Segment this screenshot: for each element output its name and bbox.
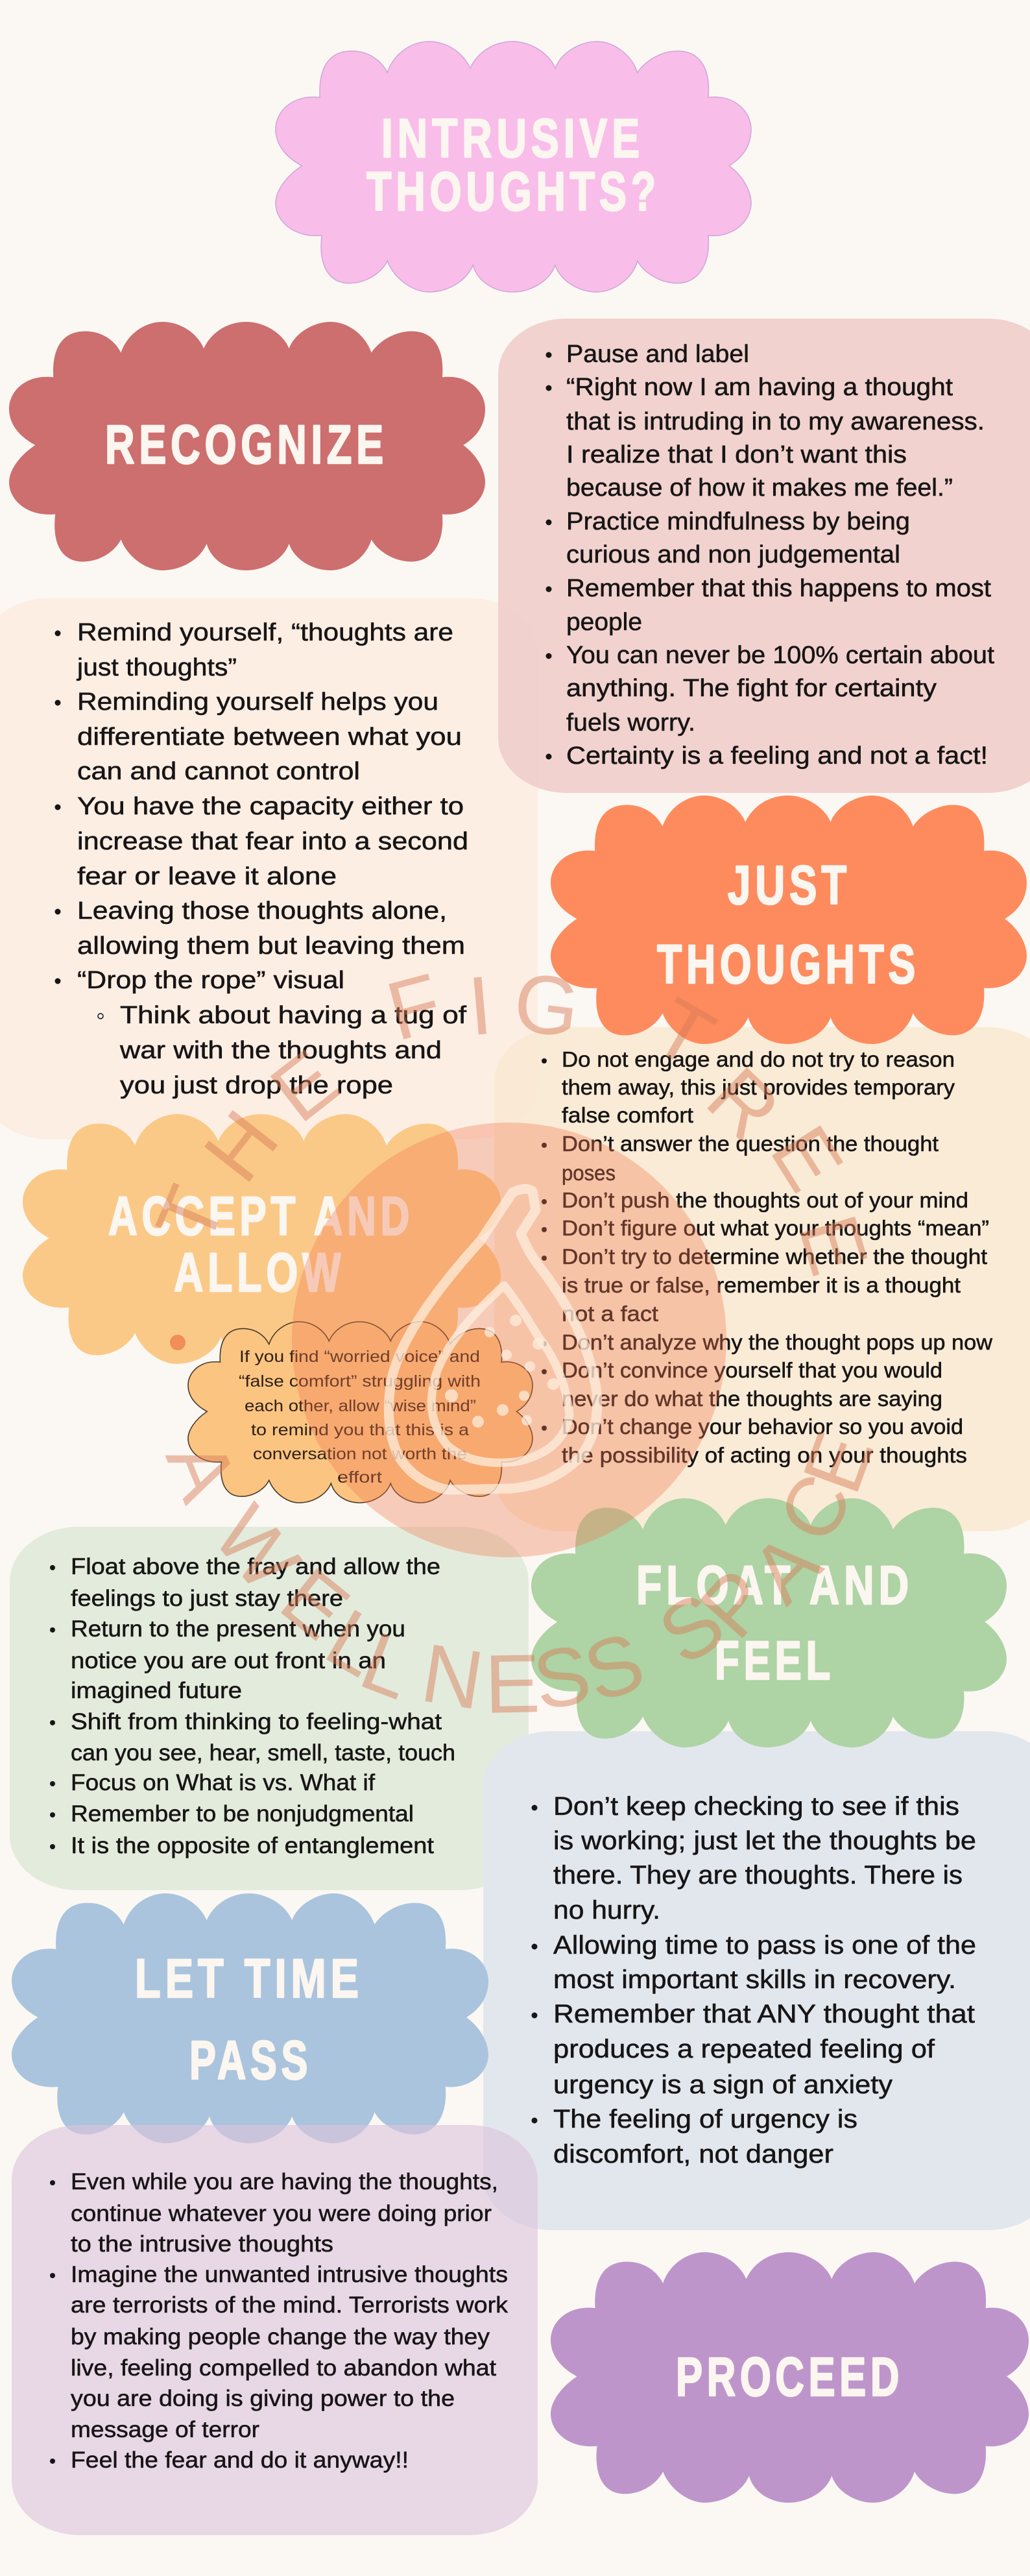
watermark text: a wellness space: L [311, 1591, 398, 1695]
callout cloud: worried voice [188, 1322, 533, 1503]
watermark text: the fig tree: E [781, 1205, 885, 1285]
list text: pause and label: because of how it makes me feel.” [566, 474, 953, 502]
list text: float above the fray: Remember to be nonjudgmental [71, 1801, 414, 1827]
list text: pause and label: “Right now I am having a thought [566, 374, 953, 401]
list text: remind yourself: Leaving those thoughts alone, [77, 897, 447, 925]
panel: do not engage list [494, 1027, 1030, 1531]
watermark text: a wellness space: W [195, 1489, 317, 1609]
list text: float above the fray: imagined future [71, 1678, 242, 1703]
panel: thoughts are just thoughts list [0, 598, 538, 1139]
panel: float list [10, 1527, 529, 1890]
watermark text: a wellness space: S [573, 1614, 654, 1720]
list text: do not keep checking: discomfort, not danger [553, 2140, 833, 2169]
list text: pause and label: people [566, 609, 642, 636]
watermark text: a wellness space: E [785, 1420, 891, 1504]
list text: pause and label: anything. The fight for certainty [566, 675, 937, 702]
list text: do not engage [542, 1047, 992, 1467]
callout text: effort [337, 1468, 382, 1487]
list text: remind yourself: you just drop the rope [120, 1072, 393, 1099]
list text: even while having the thoughts: live, feeling compelled to abandon what [71, 2355, 496, 2381]
heading cloud: let time pass [12, 1893, 488, 2143]
watermark text: a wellness space: S [527, 1627, 597, 1728]
list text: pause and label: I realize that I don’t want this [566, 441, 907, 468]
watermark text: the fig tree: H [186, 1094, 296, 1198]
list text: do not engage: not a fact [562, 1302, 658, 1326]
list text: do not engage: Don’t figure out what your thoughts “mean” [562, 1216, 989, 1240]
panel: let time pass list [483, 1731, 1030, 2230]
list text: float above the fray: feelings to just stay there [71, 1586, 343, 1611]
list text: pause and label [546, 341, 994, 770]
watermark text: a wellness space: L [349, 1614, 425, 1718]
list text: even while having the thoughts: you are doing is giving power to the [71, 2386, 455, 2411]
list text: do not keep checking: The feeling of urgency is [553, 2105, 857, 2133]
heading: float and feel: FLOAT AND [636, 1555, 913, 1616]
watermark circle [292, 1123, 726, 1557]
watermark text: the fig tree: T [638, 980, 728, 1086]
heading: let time pass: PASS [189, 2030, 312, 2091]
list text: float above the fray: Shift from thinking to feeling-what [71, 1709, 442, 1734]
list text: do not keep checking: produces a repeated feeling of [553, 2035, 935, 2063]
panel: proceed list [12, 2125, 538, 2535]
list text: pause and label: curious and non judgemental [566, 541, 900, 568]
list text: even while having the thoughts: Feel the fear and do it anyway!! [71, 2448, 409, 2473]
list text: remind yourself: increase that fear into a second [77, 828, 468, 855]
watermark text: a wellness space: N [416, 1627, 489, 1727]
heading cloud: float and feel [531, 1498, 1007, 1747]
watermark text: the fig tree: I [464, 959, 496, 1053]
list text: float above the fray: notice you are out front in an [71, 1648, 386, 1673]
title text [366, 108, 660, 222]
list text: do not engage: Don’t answer the question the thought [562, 1132, 939, 1156]
list text: even while having the thoughts: continue whatever you were doing prior [71, 2201, 492, 2226]
heading: accept and allow: ACCEPT AND [108, 1185, 414, 1246]
list text: do not engage: Don’t convince yourself that you would [562, 1358, 942, 1382]
watermark: the fig tree logo [138, 955, 891, 1731]
list text: do not engage: Don’t push the thoughts out of your mind [562, 1188, 968, 1212]
title text: INTRUSIVE [381, 108, 644, 169]
heading: accept and allow [108, 1185, 414, 1303]
icon: fig seeds [445, 1315, 559, 1428]
list text: pause and label: Certainty is a feeling and not a fact! [566, 742, 988, 770]
watermark text: a wellness space: P [682, 1552, 789, 1655]
heading: float and feel: FEEL [715, 1630, 835, 1691]
watermark dot [170, 1335, 186, 1350]
list text: do not engage: Don’t analyze why the thought pops up now [562, 1330, 992, 1354]
heading cloud: recognize [9, 322, 485, 570]
heading: float and feel [636, 1555, 913, 1691]
list text: remind yourself: Think about having a tug of [120, 1002, 467, 1029]
title cloud [276, 42, 751, 292]
title text: THOUGHTS? [366, 161, 660, 222]
list text: even while having the thoughts: by making people change the way they [71, 2324, 490, 2350]
list text: pause and label: Remember that this happens to most [566, 575, 991, 602]
list text: do not engage: poses [562, 1161, 616, 1185]
heading: just thoughts [657, 855, 920, 995]
icon: fig inner drop [431, 1285, 569, 1463]
list text: remind yourself: You have the capacity either to [77, 793, 464, 820]
watermark text: a wellness space: A [734, 1516, 839, 1621]
callout text: “false comfort” struggling with [239, 1372, 481, 1391]
panel: recognize list [498, 319, 1030, 793]
list text: do not keep checking: is working; just let the thoughts be [553, 1827, 976, 1855]
callout text: each other, allow “wise mind” [245, 1397, 476, 1415]
watermark text: a wellness space: C [760, 1459, 870, 1557]
list text: even while having the thoughts: Imagine the unwanted intrusive thoughts [71, 2262, 508, 2287]
list text: even while having the thoughts: Even while you are having the thoughts, [71, 2169, 498, 2194]
watermark text: the fig tree: E [753, 1110, 861, 1206]
list text: pause and label: Pause and label [566, 341, 749, 368]
list text: float above the fray: can you see, hear, smell, taste, touch [71, 1740, 455, 1766]
list text: do not keep checking: there. They are thoughts. There is [553, 1861, 963, 1889]
heading: just thoughts: JUST [728, 855, 851, 916]
callout text: to remind you that this is a [251, 1421, 469, 1439]
list text: remind yourself: just thoughts” [77, 654, 237, 681]
list text: remind yourself: “Drop the rope” visual [77, 967, 344, 994]
watermark text: the fig tree: T [138, 1174, 243, 1257]
list text: even while having the thoughts: to the intrusive thoughts [71, 2231, 333, 2257]
list text: even while having the thoughts [50, 2169, 509, 2473]
list text: remind yourself [54, 619, 468, 1099]
list text: do not keep checking: most important skills in recovery. [553, 1965, 956, 1994]
watermark text: a wellness space [148, 1420, 891, 1731]
list text: float above the fray: It is the opposite of entanglement [71, 1833, 434, 1858]
list text: float above the fray: Return to the present when you [71, 1616, 405, 1642]
watermark text: the fig tree: F [377, 956, 451, 1059]
list text: do not keep checking: urgency is a sign of anxiety [553, 2071, 892, 2099]
list text: do not engage: Do not engage and do not try to reason [562, 1047, 955, 1071]
list text: remind yourself: differentiate between what you [77, 723, 462, 751]
list text: do not engage: Don’t try to determine whether the thought [562, 1245, 987, 1269]
heading: let time pass: LET TIME [135, 1948, 363, 2009]
watermark text: a wellness space: E [264, 1551, 366, 1657]
list text: pause and label: that is intruding in to my awareness. [566, 408, 985, 435]
list text: even while having the thoughts: message of terror [71, 2417, 259, 2442]
callout text: If you find “worried voice” and [239, 1348, 480, 1366]
list text: do not engage: never do what the thoughts are saying [562, 1387, 942, 1411]
heading cloud: proceed [551, 2252, 1029, 2503]
watermark text: the fig tree: E [254, 1032, 355, 1140]
list text: do not engage: false comfort [562, 1103, 693, 1127]
heading: recognize: RECOGNIZE [105, 414, 388, 475]
watermark text: a wellness space: S [643, 1575, 740, 1683]
list text: float above the fray: Focus on What is vs. What if [71, 1770, 375, 1795]
heading: proceed: PROCEED [676, 2346, 904, 2407]
list text: remind yourself: Reminding yourself helps you [77, 688, 438, 716]
callout text: conversation not worth the [253, 1445, 467, 1463]
list text: do not engage: the possibility of acting on your thoughts [562, 1443, 967, 1467]
list text: remind yourself: Remind yourself, “thoughts are [77, 619, 453, 646]
list text: remind yourself: can and cannot control [77, 758, 360, 785]
list text: do not keep checking: Remember that ANY thought that [553, 2000, 975, 2028]
list text: do not keep checking: no hurry. [553, 1896, 660, 1925]
list text: pause and label: fuels worry. [566, 709, 695, 736]
icon: fig outline [389, 1189, 597, 1490]
list text: pause and label: Practice mindfulness by being [566, 508, 910, 535]
list text: do not engage: Don’t change your behavior so you avoid [562, 1415, 963, 1439]
list text: pause and label: You can never be 100% certain about [566, 642, 994, 669]
watermark text: the fig tree: R [689, 1050, 797, 1158]
list text: do not keep checking [532, 1792, 976, 2169]
list text: float above the fray [50, 1554, 455, 1858]
watermark text: the fig tree [138, 955, 885, 1285]
list text: remind yourself: war with the thoughts and [119, 1037, 442, 1064]
list text: even while having the thoughts: are terrorists of the mind. Terrorists work [71, 2292, 509, 2318]
heading: let time pass [135, 1948, 363, 2091]
list text: float above the fray: Float above the fray and allow the [71, 1554, 440, 1579]
list text: do not engage: them away, this just provides temporary [562, 1075, 955, 1099]
watermark text: a wellness space: E [484, 1637, 541, 1731]
list text: do not engage: is true or false, remember it is a thought [562, 1273, 961, 1297]
list text: do not keep checking: Don’t keep checking to see if this [553, 1792, 959, 1821]
heading: just thoughts: THOUGHTS [657, 934, 920, 995]
heading cloud: accept and allow [23, 1114, 501, 1364]
watermark text: the fig tree: G [509, 955, 584, 1056]
list text: remind yourself: allowing them but leaving them [77, 932, 465, 960]
callout text [239, 1348, 481, 1487]
list text: remind yourself: fear or leave it alone [77, 863, 337, 890]
watermark text: a wellness space: A [148, 1428, 255, 1514]
heading cloud: just thoughts [551, 796, 1027, 1044]
list text: do not keep checking: Allowing time to pass is one of the [553, 1931, 976, 1960]
heading: accept and allow: ALLOW [174, 1242, 345, 1303]
